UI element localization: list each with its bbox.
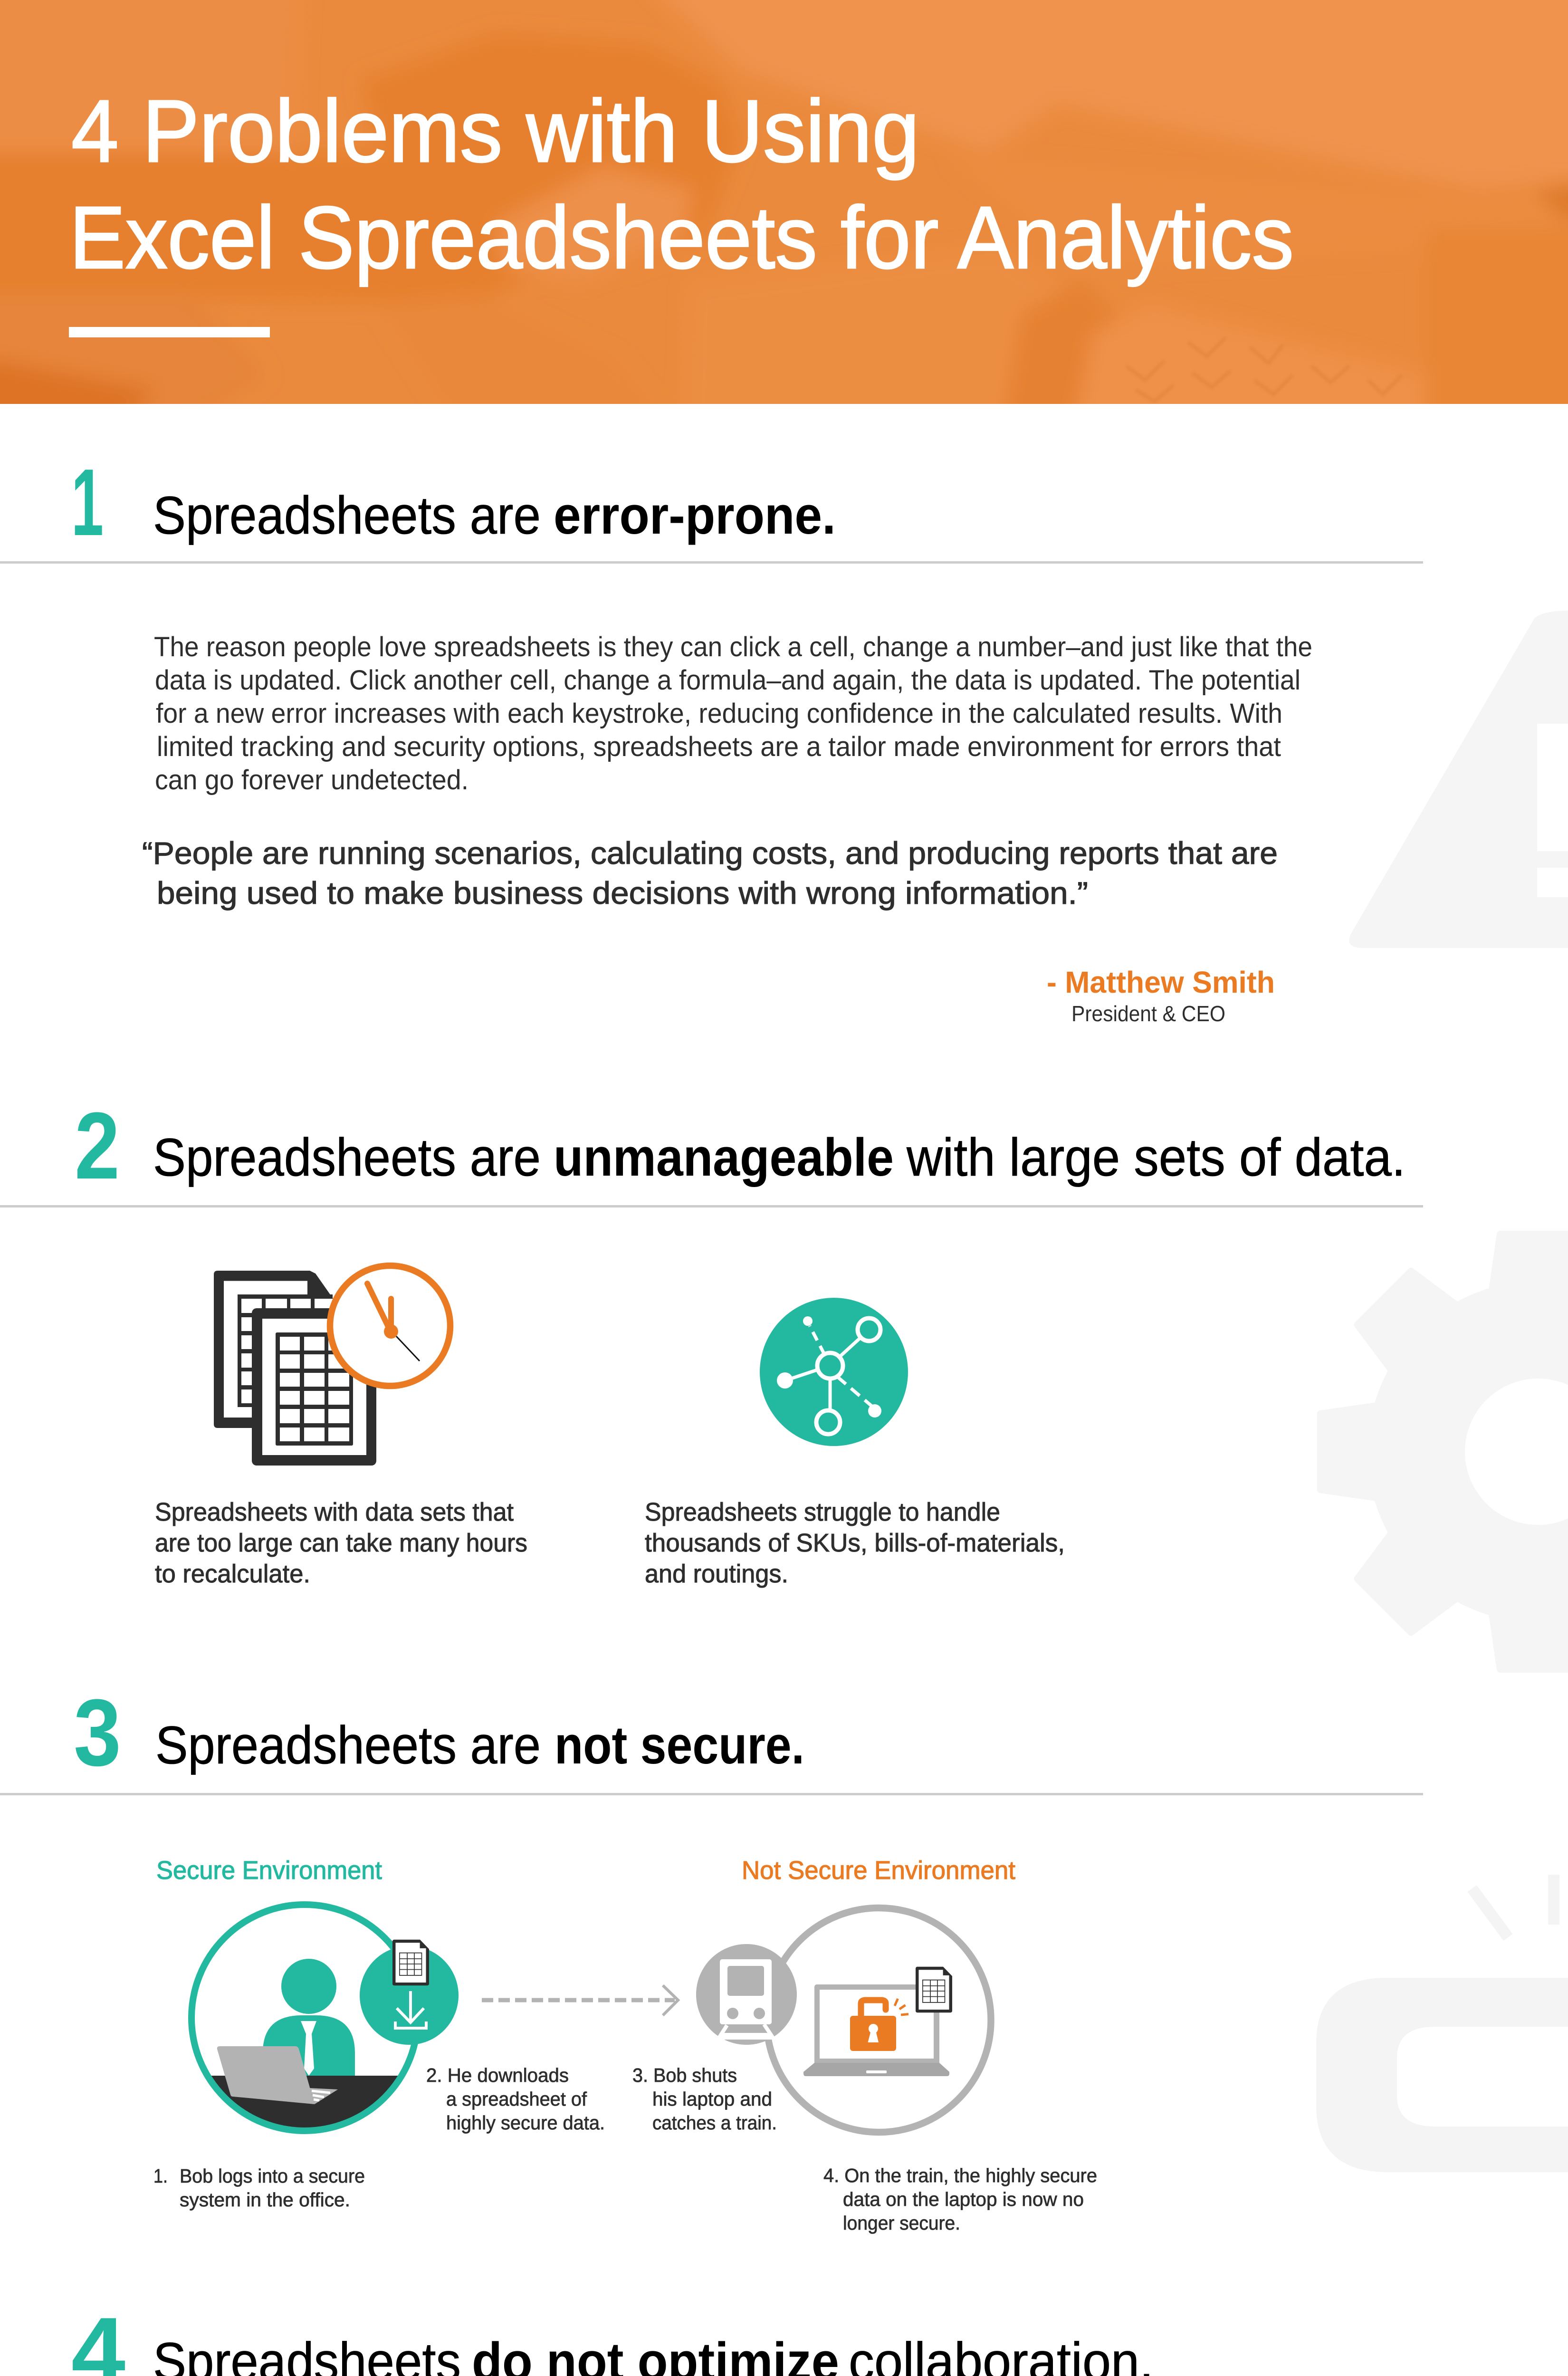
section 3 number: 3: [74, 1680, 121, 1786]
step 4 text: 4. On the train, the highly secure: [823, 2165, 1097, 2186]
section 2 caption left: Spreadsheets with data sets that: [155, 1498, 514, 1526]
section 1 heading: error-prone.: [554, 486, 836, 545]
background icon: gear: [1320, 1234, 1568, 1669]
step 4 text: data on the laptop is now no: [843, 2188, 1084, 2210]
step 4 text: [823, 2165, 1097, 2234]
step 1 text: system in the office.: [180, 2189, 350, 2211]
title: [69, 82, 1294, 287]
label: not secure environment: Not Secure Environment: [742, 1856, 1015, 1885]
step 4 text: longer secure.: [843, 2212, 960, 2234]
step 1 text: Bob logs into a secure: [180, 2165, 365, 2187]
section 1 number: 1: [71, 450, 104, 556]
step 3 text: [632, 2064, 777, 2134]
icon: download circle: [360, 1940, 459, 2045]
section 1 heading: Spreadsheets are: [153, 486, 541, 545]
quote: [142, 835, 1278, 910]
section 1 body text: for a new error increases with each keystroke, reducing confidence in the calculated results. With: [156, 698, 1282, 729]
illustration: Bob in the office: [181, 1905, 428, 2142]
dashed arrow: [482, 1985, 678, 2015]
quote: “People are running scenarios, calculating costs, and producing reports that are: [142, 835, 1278, 871]
section 1 body text: data is updated. Click another cell, change a formula–and again, the data is updated. The potential: [155, 665, 1300, 696]
section 2 heading: with large sets of data.: [906, 1128, 1405, 1187]
section 1 body text: The reason people love spreadsheets is they can click a cell, change a number–and just like that the: [154, 632, 1312, 662]
step 2 text: a spreadsheet of: [446, 2088, 587, 2110]
section 1 body text: [154, 632, 1312, 795]
section 2 heading: [153, 1128, 1405, 1187]
section 1 body text: limited tracking and security options, spreadsheets are a tailor made environment for errors that: [157, 731, 1281, 762]
section 2 caption left: to recalculate.: [155, 1560, 310, 1588]
section 2 caption right: [645, 1498, 1065, 1588]
title: 4 Problems with Using: [71, 82, 919, 181]
header banner: [0, 0, 1568, 404]
step 1 text: 1.: [153, 2165, 168, 2187]
step 2 text: highly secure data.: [446, 2112, 605, 2134]
section 2 heading: Spreadsheets are: [153, 1128, 541, 1187]
section 2 heading: unmanageable: [554, 1128, 894, 1187]
icon: train circle: [696, 1944, 797, 2045]
section 2 caption right: Spreadsheets struggle to handle: [645, 1498, 1000, 1526]
step 3 text: 3. Bob shuts: [632, 2064, 737, 2086]
title underline: [69, 327, 270, 337]
illustration: laptop unlocked: [767, 1908, 991, 2132]
step 1 text: [153, 2165, 365, 2211]
section 2 caption right: thousands of SKUs, bills-of-materials,: [645, 1529, 1065, 1557]
background icon: open lock: [1316, 1875, 1568, 2172]
section 1 heading: [153, 486, 836, 545]
step 3 text: his laptop and: [652, 2088, 772, 2110]
step 2 text: [426, 2064, 605, 2134]
section 4 heading: [153, 2332, 1154, 2376]
step 3 text: catches a train.: [652, 2112, 777, 2134]
title: Excel Spreadsheets for Analytics: [69, 189, 1294, 287]
background icon: warning triangle: [1349, 611, 1568, 948]
quote: being used to make business decisions with wrong information.”: [157, 875, 1088, 910]
section 3 heading: [155, 1715, 804, 1775]
section 3 heading: not secure.: [555, 1715, 804, 1775]
quote attribution: - Matthew Smith: [1047, 965, 1275, 999]
section 3 heading: Spreadsheets are: [155, 1715, 541, 1775]
label: secure environment: Secure Environment: [156, 1856, 382, 1885]
section 2 caption left: [155, 1498, 527, 1588]
section 1 body text: can go forever undetected.: [155, 765, 468, 795]
icon: network nodes: [760, 1298, 908, 1446]
icon: spreadsheets with clock: [214, 1266, 450, 1466]
quote attribution: [1047, 965, 1275, 1026]
quote attribution: President & CEO: [1071, 1001, 1225, 1026]
step 2 text: 2. He downloads: [426, 2064, 569, 2086]
section 2 number: 2: [75, 1093, 120, 1199]
section 2 caption left: are too large can take many hours: [155, 1529, 527, 1557]
section 2 caption right: and routings.: [645, 1560, 788, 1588]
